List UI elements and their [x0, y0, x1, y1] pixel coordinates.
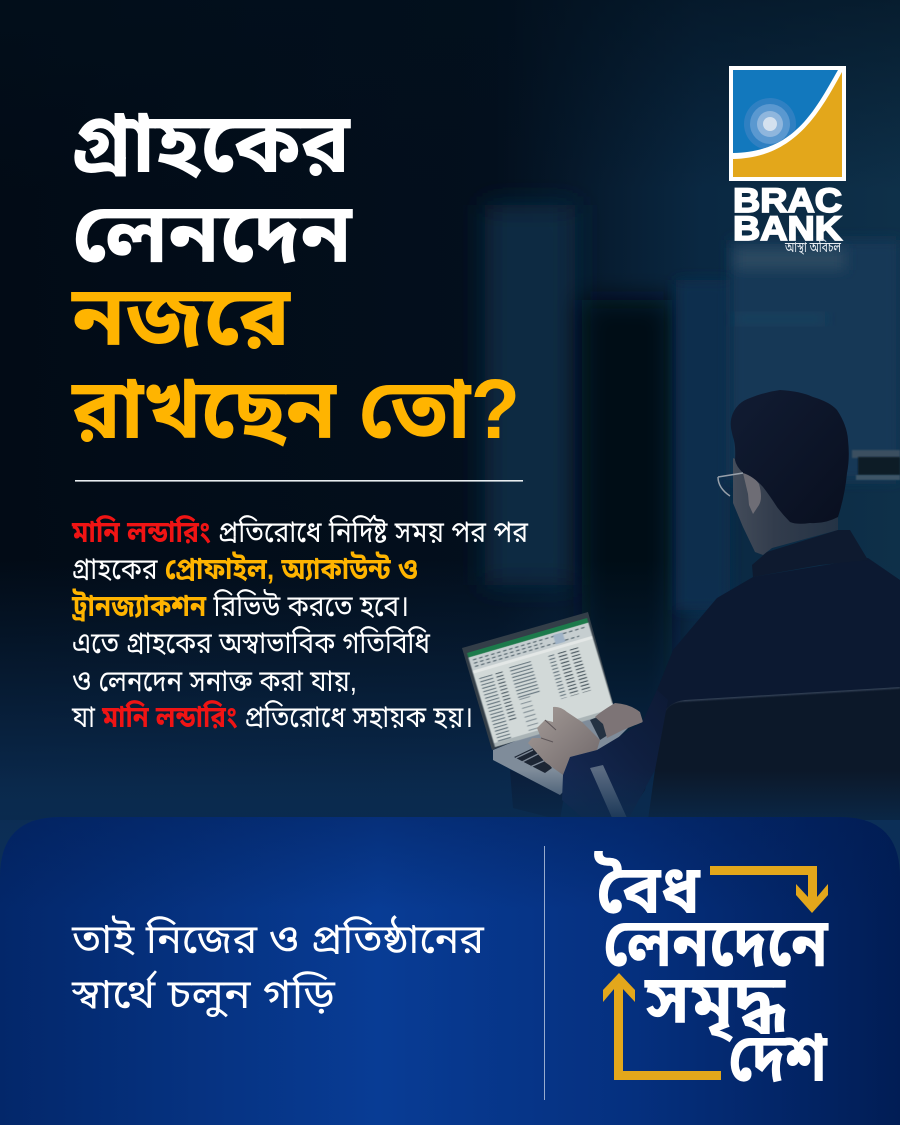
front hand	[528, 707, 600, 775]
sleeve	[562, 690, 668, 820]
torso and jacket	[562, 558, 900, 820]
arrow: bottom left	[603, 973, 721, 1080]
back hand	[595, 703, 643, 738]
title	[71, 96, 520, 456]
paragraph line 1: মানি লন্ডারিং প্রতিরোধে নির্দিষ্ট সময় পর পর	[71, 513, 529, 549]
call to action text: স্বার্থে চলুন গড়ি	[71, 969, 336, 1018]
arrow: top right	[710, 866, 828, 913]
chair	[646, 686, 900, 820]
laptop screen	[467, 618, 615, 747]
collar	[752, 530, 868, 577]
logo wordmark: BANK	[733, 210, 842, 248]
title line 3: নজরে	[71, 269, 291, 363]
hands	[528, 703, 643, 775]
title line 2: লেনদেন	[72, 186, 354, 280]
bottom panel	[0, 817, 900, 1125]
paragraph line 6: যা মানি লন্ডারিং প্রতিরোধে সহায়ক হয়।	[71, 699, 473, 734]
logo wordmark	[733, 182, 842, 248]
paragraph line 3: ট্রানজ্যাকশন রিভিউ করতে হবে।	[71, 588, 409, 623]
laptop	[462, 612, 628, 820]
laptop lid	[462, 612, 613, 750]
logo wordmark: BRAC	[733, 182, 842, 220]
person working on laptop	[0, 390, 900, 820]
campaign logo	[594, 851, 829, 1096]
paragraph line 4: এতে গ্রাহকের অস্বাভাবিক গতিবিধি	[72, 625, 431, 660]
laptop base	[493, 702, 628, 795]
paragraph line 5: ও লেনদেন সনাক্ত করা যায়,	[72, 665, 357, 698]
campaign wordmark: সমৃদ্ধ	[644, 962, 787, 1043]
BRAC Bank logo	[729, 66, 846, 255]
neck and face	[733, 458, 838, 555]
call to action text: তাই নিজের ও প্রতিষ্ঠানের	[71, 914, 485, 962]
logo tagline: আস্থা অবিচল	[784, 239, 842, 255]
title line 1: গ্রাহকের	[72, 96, 351, 190]
keyboard keys	[514, 747, 552, 773]
campaign wordmark: বৈধ	[594, 851, 701, 928]
logo square	[729, 66, 846, 181]
title line 4: রাখছেন তো?	[71, 362, 520, 456]
hair	[731, 390, 849, 524]
campaign wordmark: লেনদেনে	[603, 905, 829, 981]
call to action text	[71, 914, 485, 1018]
chair strut	[590, 765, 627, 820]
ear	[743, 473, 761, 514]
campaign wordmark: দেশ	[728, 1020, 828, 1096]
laptop underside	[510, 770, 565, 820]
campaign wordmark	[594, 851, 829, 1096]
paragraph line 2: গ্রাহকের প্রোফাইল, অ্যাকাউন্ট ও	[72, 551, 418, 586]
body paragraph	[71, 513, 529, 734]
glasses	[718, 473, 743, 496]
